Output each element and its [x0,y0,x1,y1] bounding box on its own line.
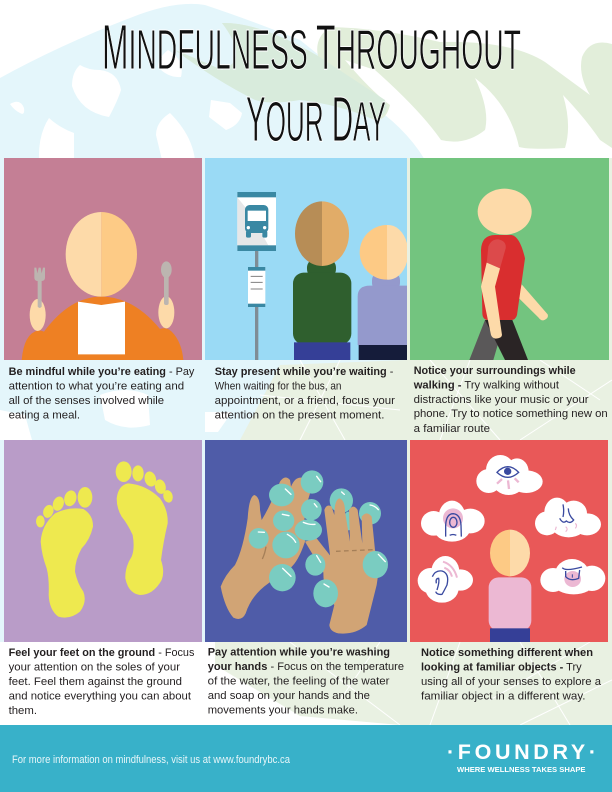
icon: fingertip [443,508,463,537]
text: walking: Notice your surroundings while [414,365,576,377]
background: blue leaf [0,4,425,642]
text: waiting: appointment, or a friend, focus your [215,395,395,407]
timetable [248,267,265,307]
cloud: hearing [418,556,473,603]
icon: tongue [562,567,582,587]
text: washing hands: your hands - Focus on the temperature [208,661,404,673]
panel: waiting [205,158,407,360]
text: washing hands: movements your hands make. [208,704,358,716]
text: feet: them. [9,705,37,717]
panel: walking [410,158,609,360]
text: feet: Feel your feet on the ground - Focus [9,647,195,659]
title [102,11,521,155]
panel: feet [4,440,202,642]
text: eating: all of the senses involved while [9,395,164,407]
text: washing hands: Pay attention while you’re washing [208,647,390,659]
person in lilac [358,225,407,360]
text: washing hands: of the water, the feeling of the water [208,676,390,688]
text: washing hands: and soap on your hands and the [208,690,370,702]
icon: eye [497,467,519,477]
panel: washing hands [205,440,407,642]
text: eating: attention to what you’re eating and [9,380,184,392]
title: YOUR DAY [246,83,386,155]
text: waiting: attention on the present moment. [215,410,384,422]
eating figure [22,212,183,360]
icon: nose [555,504,576,532]
text: feet: feet. Feel them against the ground [9,676,182,688]
text: walking: a familiar route [414,423,490,435]
cloud: smell [535,498,601,537]
text: walking: distractions like your music or your [414,394,589,406]
icon: footprints [36,461,174,618]
icon: spoon [161,261,172,305]
text: waiting: Stay present while you’re waiting - [215,366,394,378]
text: walking [413,365,608,435]
text: walking: walking - Try walking without [413,380,560,392]
text: senses: using all of your senses to explore a [421,676,602,688]
text: senses: Notice something different when [421,647,593,659]
text: eating [9,366,195,422]
cloud: touch [421,501,485,542]
panel: senses [410,440,608,642]
icon: fork [34,268,45,308]
person in green [293,201,351,360]
logo: Foundry: WHERE WELLNESS TAKES SHAPE [457,765,586,774]
text: senses [421,647,602,702]
person [489,530,531,642]
text: feet [9,647,195,717]
cloud: taste [540,559,605,594]
text: feet: your attention on the soles of your [9,662,180,674]
text: waiting [215,366,395,422]
text: washing hands [208,647,404,716]
text: feet: and notice everything you can about [9,690,192,702]
background: green leaf [175,23,612,725]
text: waiting: When waiting for the bus, an [215,380,342,392]
logo: Foundry: ·FOUNDRY· [447,740,596,764]
hands and bubbles [221,470,388,634]
text: walking: phone. Try to notice something new on [414,408,608,420]
cloud: sight [476,455,543,495]
footer text: For more information on mindfulness, visit us at www.foundrybc.ca [12,754,291,766]
bubbles [249,470,388,607]
text: eating: eating a meal. [9,410,80,422]
footer band [0,725,612,792]
text: senses: familiar object in a different way. [421,690,586,702]
icon: bus sign [237,192,276,251]
text: eating: Be mindful while you’re eating - Pay [9,366,195,378]
text: senses: looking at familiar objects - Try [421,662,582,674]
icon: ear [432,562,457,594]
walking figure [469,189,548,360]
panel: eating [4,158,202,360]
waiting figures and bus stop [237,192,407,360]
